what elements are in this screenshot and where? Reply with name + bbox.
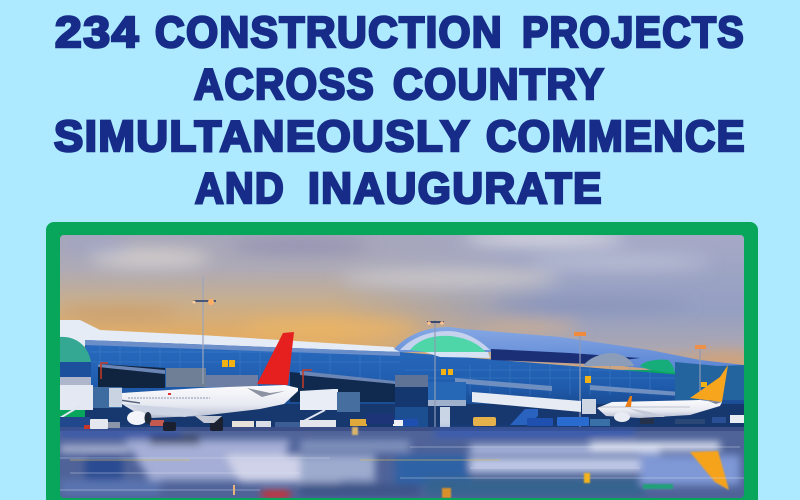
title: CONSTRUCTION: [155, 9, 503, 57]
orange-tail airplane: [597, 365, 728, 424]
red-tail airplane: [93, 332, 298, 431]
light poles: [192, 277, 706, 428]
grey connectors: [166, 368, 206, 387]
blue stairs and carts: [510, 409, 538, 425]
facade mullions: [90, 345, 680, 395]
teal dome: [60, 337, 91, 362]
title: INAUGURATE: [308, 165, 603, 213]
title: SIMULTANEOUSLY: [54, 113, 471, 161]
grey dome: [583, 353, 634, 366]
lower dark base: [85, 404, 744, 424]
title: AND: [195, 165, 285, 213]
terminal building: [60, 320, 745, 430]
left white roof: [60, 320, 402, 352]
red posts: [101, 363, 312, 388]
title: ACROSS: [194, 61, 375, 109]
title: COMMENCE: [486, 113, 746, 161]
title: COUNTRY: [393, 61, 605, 109]
yellow signs: [222, 360, 707, 387]
arched roof: [394, 327, 744, 372]
wet reflections: [60, 431, 740, 498]
dark canopy: [98, 364, 165, 388]
green canopy: [640, 360, 675, 373]
title: [54, 9, 746, 213]
sky: [60, 232, 755, 370]
title: PROJECTS: [522, 9, 745, 57]
airport photo: [60, 232, 755, 500]
right rounded hall: [675, 362, 744, 400]
ground: [60, 427, 744, 500]
jet bridges and ground vehicles: [60, 385, 744, 429]
green photo frame: [46, 222, 758, 500]
title: 234: [55, 9, 140, 57]
dark roof band: [491, 349, 640, 364]
green skylight: [410, 336, 490, 357]
left jet bridge head: [93, 387, 122, 408]
main glass facade: [85, 340, 744, 404]
